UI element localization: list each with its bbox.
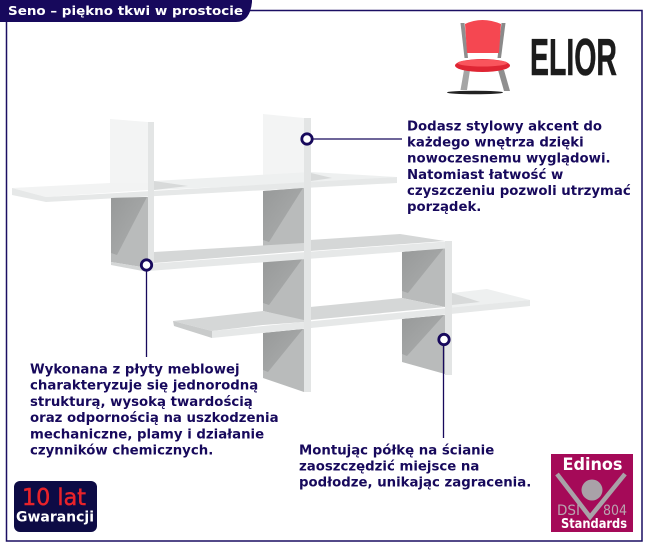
- logo: Elior: [447, 20, 617, 94]
- text block: mounting: [299, 442, 531, 490]
- vertical front edges: [148, 122, 154, 269]
- back uprights: [110, 119, 148, 186]
- text block: material: czynników chemicznych.: [30, 442, 213, 458]
- text block: mounting: podłodze, unikając zagracenia.: [299, 476, 531, 490]
- text block: style: Natomiast łatwość w: [407, 167, 563, 183]
- badge: Edinos standards: DSI: [557, 503, 580, 519]
- text block: material: mechaniczne, plamy i działanie: [30, 427, 264, 442]
- middle shelf: [111, 262, 148, 272]
- badge: Edinos standards: 804: [603, 503, 627, 519]
- text block: style: każdego wnętrza dzięki: [407, 136, 584, 151]
- text block: material: charakteryzuje się jednorodną: [30, 379, 258, 394]
- text block: material: strukturą, wysoką twardością: [30, 394, 253, 410]
- text block: mounting: Montując półkę na ścianie: [299, 442, 494, 458]
- callout: right marker and leader: [439, 334, 449, 438]
- text block: material: Wykonana z płyty meblowej: [30, 362, 240, 378]
- badge: 10 year warranty: 10 lat: [22, 485, 86, 511]
- badge: Edinos standards: Standards: [561, 517, 627, 532]
- text block: material: oraz odpornością na uszkodzenia: [30, 410, 279, 426]
- badge: 10 year warranty: Gwarancji: [16, 510, 94, 526]
- text block: style: [407, 120, 631, 215]
- text block: mounting: zaoszczędzić miejsce na: [299, 458, 479, 474]
- heading: [0, 0, 252, 22]
- text block: style: czyszczeniu pozwoli utrzymać: [407, 183, 631, 199]
- badge: Edinos standards: Edinos: [562, 455, 622, 475]
- text block: style: Dodasz stylowy akcent do: [407, 120, 602, 134]
- top shelf: [12, 183, 148, 197]
- lower shelf: [173, 311, 263, 331]
- text block: style: nowoczesnemu wyglądowi.: [407, 152, 611, 167]
- heading: Seno – piękno tkwi w prostocie: [8, 3, 243, 18]
- badge: Edinos standards: [551, 454, 633, 532]
- badge: 10 year warranty: [14, 481, 97, 532]
- text block: style: porządek.: [407, 200, 481, 215]
- callout: left marker and leader: [141, 260, 152, 357]
- text block: material: [30, 362, 279, 458]
- icon: chair: [447, 20, 510, 94]
- callout: top marker and leader: [302, 134, 402, 144]
- shelf illustration: [12, 114, 530, 392]
- dark side panels: [111, 197, 148, 268]
